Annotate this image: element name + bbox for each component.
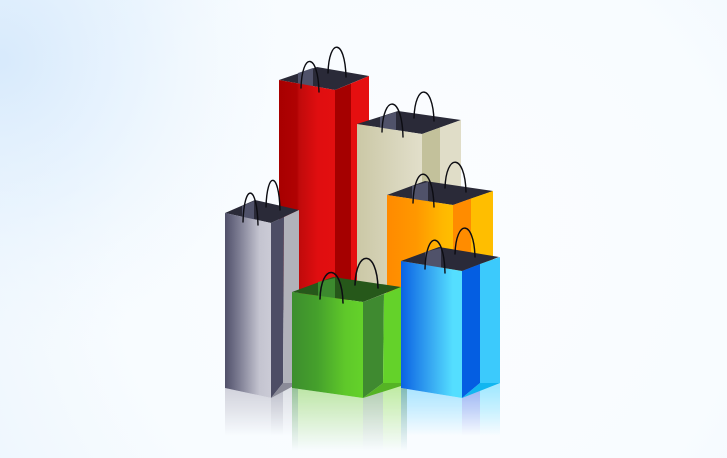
handles xyxy=(382,92,434,137)
handles xyxy=(413,162,466,207)
handles xyxy=(243,180,280,225)
bag: blue xyxy=(401,228,500,398)
handles xyxy=(425,228,475,273)
handles xyxy=(320,258,378,303)
handles xyxy=(301,47,346,92)
bag: red xyxy=(279,47,369,310)
bag: beige xyxy=(357,92,461,300)
reflection: green bag xyxy=(292,383,407,452)
infographic: shopping bags bar chart xyxy=(0,0,500,458)
reflection: blue bag xyxy=(407,383,500,432)
reflection: grey bag xyxy=(225,384,292,430)
bag: green xyxy=(292,258,401,398)
bag: grey xyxy=(225,180,299,398)
bag: orange xyxy=(387,162,493,300)
